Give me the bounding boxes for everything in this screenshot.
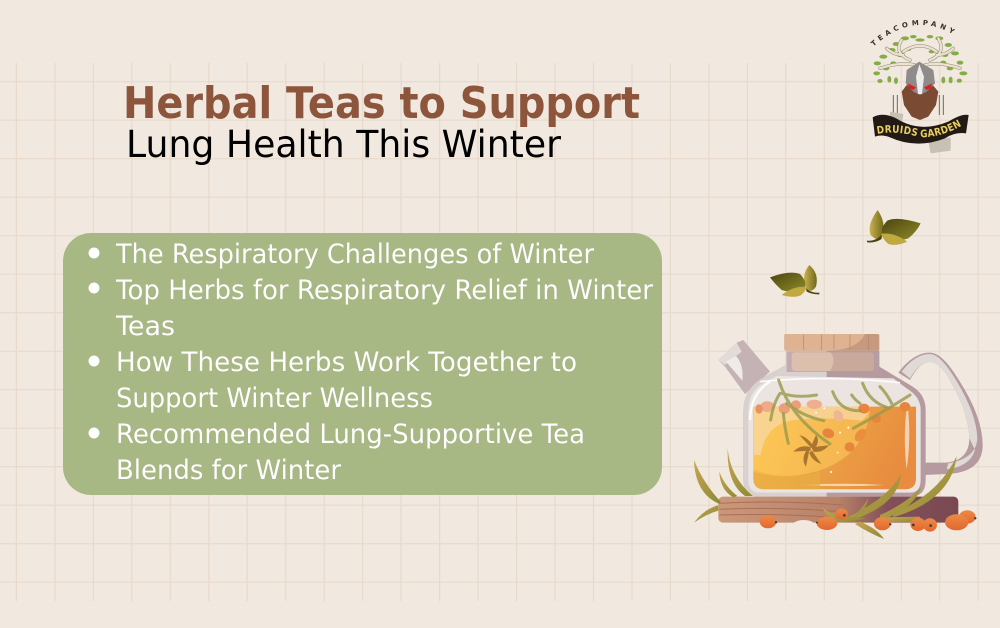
bullet list: Recommended Lung-Supportive Tea xyxy=(116,419,585,450)
icon: logo Druids Garden xyxy=(870,20,969,154)
icon: teapot illustration xyxy=(694,334,983,539)
logo druid face xyxy=(893,62,943,120)
logo banner: DRUIDS GARDEN xyxy=(877,120,961,138)
bullet list: Top Herbs for Respiratory Relief in Winter xyxy=(115,275,653,306)
icon: lower leaves xyxy=(770,265,819,297)
wooden board xyxy=(718,497,958,524)
floating berries xyxy=(755,400,910,452)
teapot wood lid xyxy=(784,334,879,351)
star anise xyxy=(793,435,829,467)
bullet list: How These Herbs Work Together to xyxy=(116,347,577,378)
teapot glass body xyxy=(743,351,926,497)
title: Herbal Teas to Support xyxy=(123,78,640,129)
sprigs in tea xyxy=(771,380,910,444)
bullet list: Blends for Winter xyxy=(116,455,341,486)
logo arc text: TEACOMPANY xyxy=(870,20,956,46)
title xyxy=(123,78,640,166)
tea liquid xyxy=(753,403,916,489)
needles left xyxy=(694,448,753,523)
title: Lung Health This Winter xyxy=(126,123,562,166)
bullet list: Support Winter Wellness xyxy=(116,383,433,414)
panel: topics list xyxy=(63,233,662,495)
bullet list: The Respiratory Challenges of Winter xyxy=(115,239,594,270)
teapot spout xyxy=(718,340,770,394)
logo tree xyxy=(873,35,967,84)
orange berries xyxy=(760,509,976,532)
teapot neck xyxy=(787,351,879,372)
teapot handle xyxy=(898,353,983,475)
bullet list xyxy=(88,239,653,486)
needles right xyxy=(823,456,957,539)
bullet list: Teas xyxy=(115,311,175,342)
icon: upper leaves xyxy=(867,210,921,245)
